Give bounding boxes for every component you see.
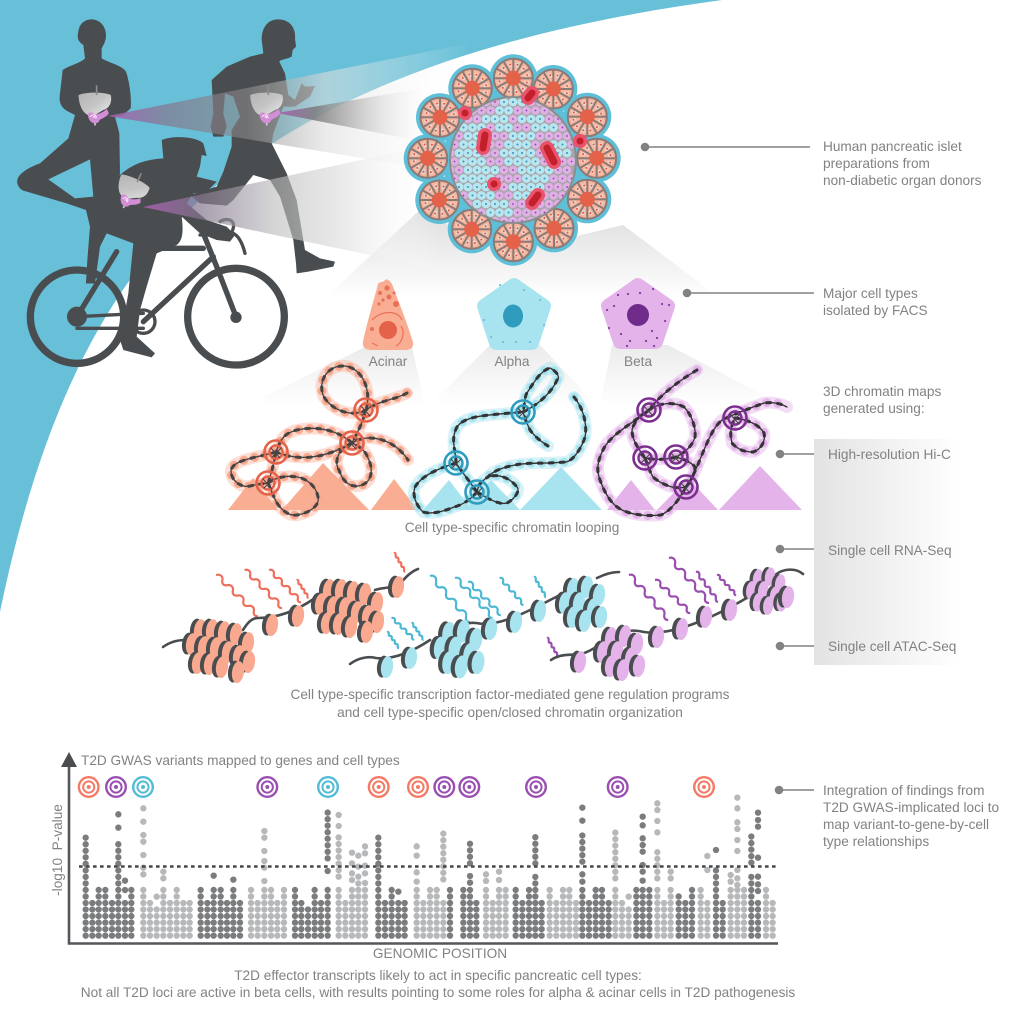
beam from standing person to islet xyxy=(108,43,470,176)
variant targets xyxy=(79,777,714,797)
callout: Hi-C: High-resolution Hi-C xyxy=(828,447,951,462)
nucleosome fiber: alpha xyxy=(350,572,619,679)
label: 3D chromatin maps: 3D chromatin maps xyxy=(823,384,941,399)
chromatin loops: acinar xyxy=(231,366,408,515)
icon: organs and pancreas runner xyxy=(250,85,283,125)
chromatin loops: alpha xyxy=(414,368,586,513)
silhouette: runner xyxy=(190,19,335,273)
transcripts beta xyxy=(547,558,736,657)
callout: islet preparations xyxy=(641,139,982,188)
callout: integration: map variant-to-gene-by-cell xyxy=(823,817,989,832)
callout: RNA-Seq: Single cell RNA-Seq xyxy=(828,543,952,558)
axes xyxy=(61,752,778,944)
beam from cyclist to islet xyxy=(143,143,440,270)
icon: organs and pancreas cyclist xyxy=(109,166,154,215)
callout: islet preparations: non-diabetic organ donors xyxy=(823,173,982,188)
label: alpha: Alpha xyxy=(495,354,530,369)
caption: transcription programs: Cell type-specific transcription factor-mediated gene regulation programs xyxy=(290,687,730,702)
caption: T2D effector transcripts: T2D effector transcripts likely to act in specific pancreatic cell types: xyxy=(234,968,642,983)
cyclist body xyxy=(86,137,235,357)
central alpha and beta cells xyxy=(449,96,577,224)
y axis label: -log10 P-value xyxy=(50,804,65,896)
caption: transcription programs: and cell type-specific open/closed chromatin organization xyxy=(337,705,683,720)
nucleosome fiber: acinar xyxy=(163,553,418,684)
silhouette: standing person in tree pose xyxy=(17,19,131,283)
islet teal background xyxy=(404,54,621,266)
callout: major cell types xyxy=(683,286,928,318)
nucleosome fiber: beta xyxy=(547,558,803,682)
caption: T2D effector transcripts: Not all T2D loci are active in beta cells, with results pointing to some roles for alpha & acinar cells in T2D pathogenesis xyxy=(81,985,795,1000)
callout: integration: Integration of findings from xyxy=(823,783,985,798)
callout: integration: T2D GWAS-implicated loci to xyxy=(823,800,1000,815)
background teal swoosh xyxy=(0,0,722,612)
callout: integration: type relationships xyxy=(823,834,929,849)
chromatin loops: beta xyxy=(598,370,787,515)
label: acinar: Acinar xyxy=(369,354,408,369)
funnel from islet to cell types xyxy=(325,207,720,298)
label: beta: Beta xyxy=(624,354,652,369)
acinar rosettes xyxy=(408,59,616,261)
silhouette: cyclist on bicycle xyxy=(30,137,284,365)
cell: acinar xyxy=(363,279,413,350)
dots group right xyxy=(417,798,773,936)
plot title: T2D GWAS variants mapped to genes and cell types xyxy=(81,753,400,768)
peak triangles: alpha xyxy=(423,467,602,510)
dots group left xyxy=(86,808,405,936)
blood vessels xyxy=(465,93,580,203)
caption: chromatin looping: Cell type-specific chromatin looping xyxy=(405,520,619,535)
callout: major cell types: Major cell types xyxy=(823,286,918,301)
transcripts alpha xyxy=(387,576,546,648)
callout: major cell types: isolated by FACS xyxy=(823,303,928,318)
manhattan-style dot plot xyxy=(50,752,778,961)
icon: organs and pancreas standing person xyxy=(78,85,111,125)
callout: integration xyxy=(775,783,1000,849)
callout: islet preparations: preparations from xyxy=(823,156,930,171)
significance threshold line xyxy=(79,865,778,868)
bicycle xyxy=(30,219,284,365)
label: 3D chromatin maps: generated using: xyxy=(823,401,925,416)
cell: alpha xyxy=(484,285,544,343)
callout: islet preparations: Human pancreatic islet xyxy=(823,139,962,154)
cones from cells to chromatin xyxy=(248,345,782,405)
peak triangles: acinar xyxy=(228,463,418,510)
islet illustration xyxy=(404,54,621,266)
transcripts acinar xyxy=(216,553,405,616)
cell: beta xyxy=(607,285,669,346)
callout: ATAC-Seq: Single cell ATAC-Seq xyxy=(828,639,956,654)
beam from runner to islet xyxy=(277,87,430,143)
x axis label: GENOMIC POSITION xyxy=(373,946,507,961)
gray panel behind assay labels xyxy=(814,439,1024,665)
peak triangles: beta xyxy=(607,466,802,510)
